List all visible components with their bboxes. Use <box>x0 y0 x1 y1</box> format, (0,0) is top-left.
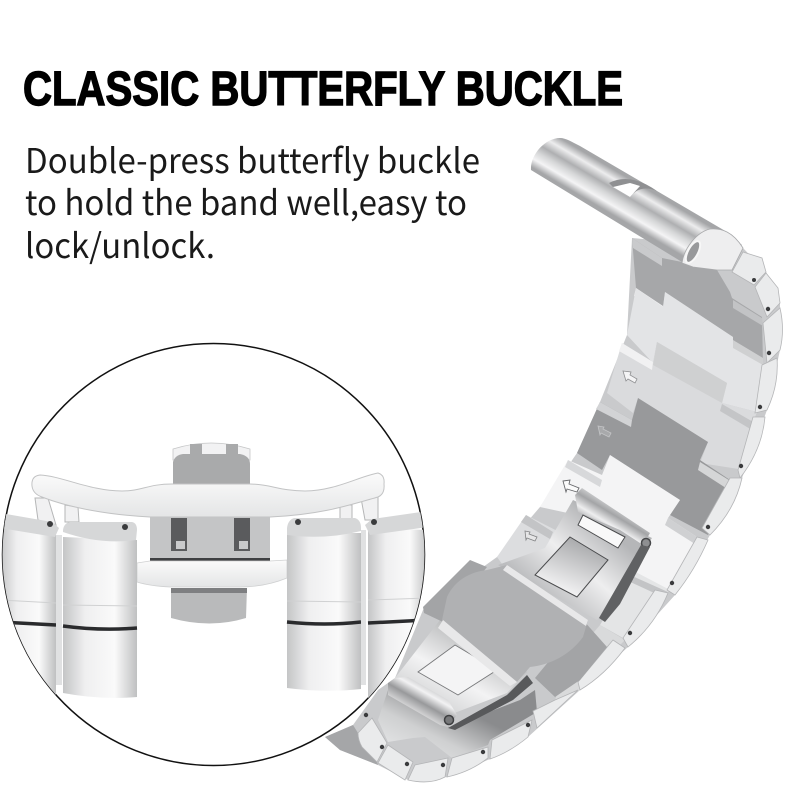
bottom tab <box>171 593 247 624</box>
cylinder far right <box>365 511 428 700</box>
top tab <box>173 454 250 484</box>
inset circle <box>0 344 428 766</box>
lower left link <box>325 725 378 765</box>
end caps along the outer edge <box>358 252 782 782</box>
link 3 mid <box>607 342 757 470</box>
title: CLASSIC BUTTERFLY BUCKLE <box>23 63 623 116</box>
clip slots <box>171 518 250 551</box>
top cap <box>173 443 250 460</box>
description text: to hold the band well,easy to <box>25 176 467 225</box>
buckle cover plate <box>442 565 588 682</box>
watch band <box>325 138 782 782</box>
bottom tab seam <box>171 588 247 593</box>
band silhouette <box>325 238 780 780</box>
link 6 behind clasp <box>497 515 670 638</box>
clasp upper arm <box>498 488 652 622</box>
cylinder right <box>287 518 361 691</box>
description text <box>25 134 480 268</box>
link 2 light <box>627 288 763 412</box>
lower link shading below clasp <box>378 690 537 758</box>
link 5 white <box>540 455 697 600</box>
dark seam <box>150 558 270 561</box>
description text: Double-press butterfly buckle <box>25 134 480 183</box>
link 1 dark <box>632 238 763 366</box>
inset buckle detail <box>0 443 428 700</box>
description text: lock/unlock. <box>25 219 215 268</box>
divider strip right <box>361 530 366 685</box>
link 7 under wing <box>555 625 625 700</box>
lower bar <box>137 560 287 587</box>
link 4 dark <box>577 398 732 535</box>
clasp lower arm <box>388 620 533 730</box>
upper curved bar <box>32 473 384 517</box>
center block <box>150 517 270 560</box>
hinge holes <box>364 263 771 767</box>
divider strip left <box>56 535 62 685</box>
plate fold highlights <box>438 565 588 686</box>
cylinder far left <box>0 513 59 700</box>
buckle wings <box>423 560 607 697</box>
spring bar tube <box>531 138 743 270</box>
circle background <box>2 344 424 766</box>
support legs <box>35 495 378 525</box>
cylinder left <box>63 522 137 698</box>
